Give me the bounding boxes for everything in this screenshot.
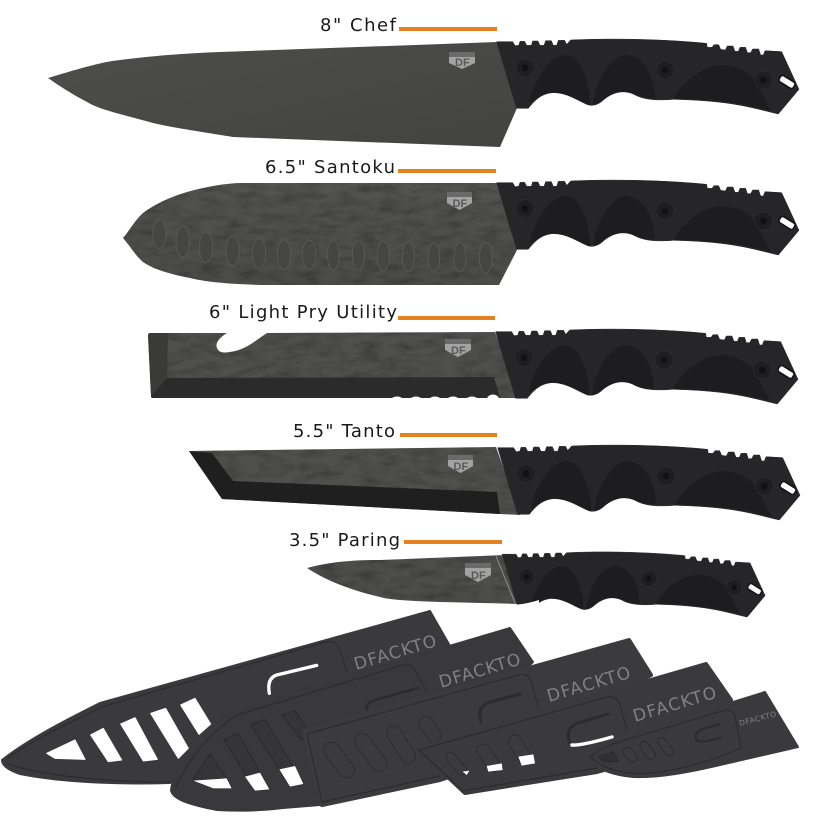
handle: paring: [502, 552, 765, 617]
label: 6" Light Pry Utility: 6" Light Pry Utility: [209, 302, 397, 323]
blade: paring: [307, 555, 522, 604]
slit opening: tanto sheath: [572, 737, 612, 745]
blade: chef: [48, 42, 517, 147]
blade: tanto: [189, 447, 520, 515]
slit: santoku sheath: [367, 688, 418, 709]
knife: 6 inch light pry utility: [148, 302, 798, 404]
sheaths group: [2, 611, 798, 811]
logo: santoku blade shield: DF: [452, 198, 467, 210]
sheath: utility: [304, 640, 651, 805]
label: 5.5" Tanto: 5.5" Tanto: [293, 421, 395, 442]
brand: paring sheath: DFACKTO: [738, 709, 777, 728]
sheath windows: chef: [47, 665, 317, 762]
logo: chef blade shield: DF: [455, 57, 470, 69]
knife: 5.5 inch tanto: [189, 421, 800, 520]
label: 8" Chef: 8" Chef: [320, 15, 397, 36]
leader line: paring: [404, 540, 502, 544]
label: 6.5" Santoku: 6.5" Santoku: [265, 157, 395, 178]
logo: utility blade shield: DF: [451, 345, 466, 357]
brand: utility sheath: DFACKTO: [545, 663, 633, 707]
leader line: utility: [398, 316, 495, 320]
sheath: santoku: [171, 628, 533, 811]
handle: tanto: [498, 445, 800, 520]
logo: santoku blade shield: [447, 192, 472, 210]
sheath windows: santoku: [193, 711, 310, 791]
sheath windows: tanto: [451, 742, 535, 775]
leader line: tanto: [400, 433, 497, 437]
brand: tanto sheath: DFACKTO: [631, 683, 719, 727]
knife: 6.5 inch santoku: [123, 157, 799, 285]
logo: chef blade shield: [449, 52, 475, 69]
logo: paring blade shield: [465, 563, 491, 582]
blade bevel: tanto: [189, 451, 500, 514]
slit: utility sheath: [480, 694, 520, 722]
logo: paring blade shield: DF: [471, 570, 486, 582]
logo: tanto blade shield: DF: [454, 461, 468, 473]
blade spine bevel: utility: [148, 333, 168, 396]
finger guard trim: paring: [510, 600, 539, 616]
leader line: chef: [399, 27, 497, 31]
blade: utility: [148, 332, 520, 398]
brand: chef sheath: DFACKTO: [352, 631, 439, 675]
blade: santoku: [123, 183, 517, 285]
recessed slots: paring sheath: [598, 724, 722, 762]
sheath: tanto: [417, 664, 731, 793]
logo: utility blade shield: [445, 339, 471, 357]
label: 3.5" Paring: 3.5" Paring: [289, 530, 400, 551]
knife: 3.5 inch paring: [289, 530, 765, 617]
handle: chef: [497, 39, 799, 114]
serrations: utility: [391, 394, 499, 404]
brand: santoku sheath: DFACKTO: [437, 650, 523, 693]
handle: santoku: [497, 180, 799, 255]
knife: 8 inch chef: [48, 15, 799, 147]
blade bevel: utility: [151, 377, 500, 398]
blade scallops: santoku: [153, 220, 492, 273]
sheath: paring: [585, 692, 798, 777]
logo: tanto blade shield: [448, 455, 473, 473]
slit: tanto sheath: [568, 714, 608, 743]
handle: utility: [496, 329, 798, 404]
tang line: paring: [496, 556, 515, 603]
recessed slots: utility sheath: [332, 723, 434, 770]
leader line: santoku: [398, 169, 496, 173]
sheath: chef: [2, 611, 450, 783]
